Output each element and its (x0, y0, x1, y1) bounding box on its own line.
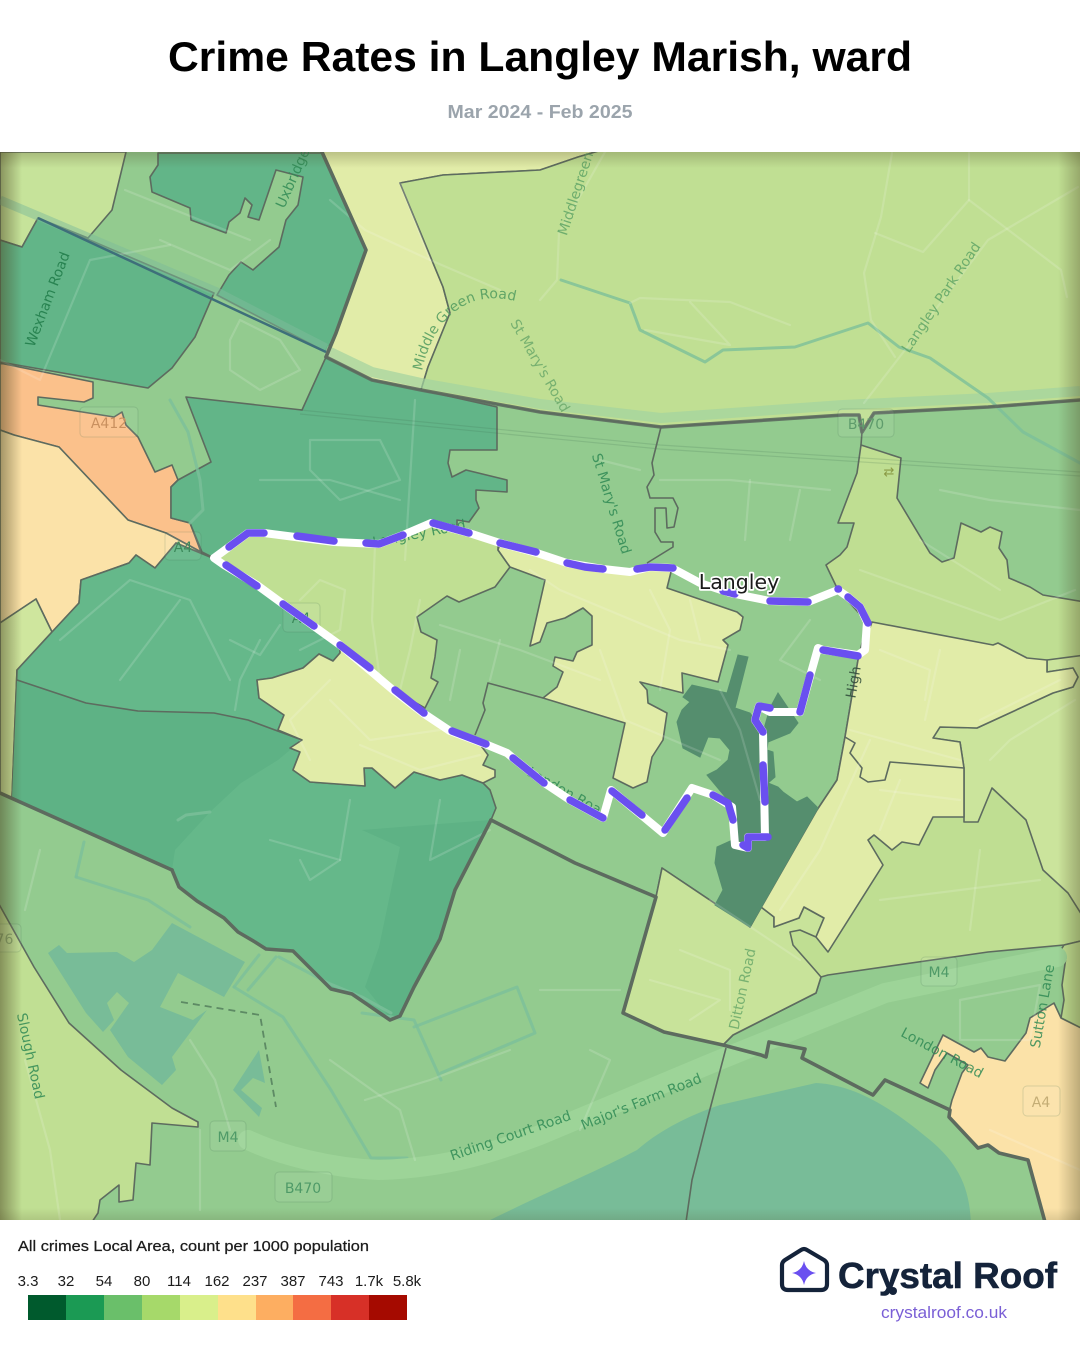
ward purple dashes (226, 523, 868, 848)
legend tick labels: 743 (318, 1273, 344, 1290)
water: reservoir west (48, 923, 245, 1085)
label: Major's Farm Road: Major's Farm Road (579, 1071, 704, 1134)
area: east and south-east pale green (623, 445, 1080, 1045)
dashed track south (181, 1002, 276, 1107)
water: canals and streams (76, 280, 1080, 1158)
area: east edge pale green (1060, 940, 1080, 1026)
label: Slough Road: Slough Road (13, 1012, 47, 1101)
area: cream west (0, 430, 210, 632)
ward boundary: white line with purple dashes (214, 523, 868, 848)
subtitle: date range: Mar 2024 - Feb 2025 (448, 102, 632, 122)
thin boundary lines (17, 427, 862, 1222)
label: Uxbridge: Uxbridge (273, 146, 314, 211)
area: darker band in south-west green (12, 681, 300, 797)
label: St Mary's Road south: St Mary's Road (588, 452, 634, 556)
label: Langley Park Road: Langley Park Road (899, 240, 984, 356)
water: small basin (233, 1050, 265, 1117)
area: pale yellow centre ward (498, 543, 743, 788)
area: east lighter green (933, 655, 1080, 920)
road shields (0, 407, 1060, 1202)
light road network (0, 152, 1080, 1220)
label: Langley Road (under boundary): Langley Road (371, 517, 467, 551)
legend tick labels: 162 (204, 1273, 230, 1290)
legend (18, 1239, 422, 1320)
area: Wexham Road dark green (0, 218, 214, 388)
area: pale green west strip (0, 599, 52, 798)
legend tick labels: 5.8k (393, 1273, 422, 1290)
area: inner east boundary (845, 737, 964, 782)
ward outline white (214, 523, 867, 848)
area: north pale yellow (322, 150, 602, 390)
label: Middle Green Road (curved): Middle Green Road (412, 288, 516, 370)
label: Wexham Road: Wexham Road (23, 250, 74, 349)
legend tick labels: 1.7k (355, 1273, 384, 1290)
legend tick labels: 54 (96, 1273, 112, 1290)
label: High Street: High (843, 665, 865, 700)
shield: B470 south (275, 1172, 332, 1202)
shield: B470 north: B470 (848, 417, 884, 433)
shield: A-road cut off at left (0, 924, 21, 952)
area: Ditton Road pale green (623, 868, 824, 1045)
shield: A4 west (165, 532, 201, 560)
shield: M4 east: M4 (928, 965, 950, 981)
area: south-west dark green (0, 543, 496, 1020)
shield: A4 south-east (1023, 1086, 1060, 1116)
shield: A4 south-east: A4 (1032, 1095, 1050, 1111)
area: north pale green (400, 150, 1080, 432)
area: north-west dark green (150, 153, 366, 352)
area: pale green north ward (214, 523, 510, 708)
icon: house outline with star (782, 1249, 827, 1290)
shield: M4 south-west (210, 1121, 246, 1151)
area: south-west pale green (0, 897, 198, 1225)
shield: M4 south-west: M4 (218, 1130, 239, 1146)
area: pale yellow east ward (750, 622, 1078, 952)
area: darker east part of south-west green (362, 820, 491, 1018)
label: London Road west (under boundary): London Road (524, 764, 612, 823)
label: London Road east: London Road (898, 1025, 986, 1082)
place label: Langley: Langley (699, 570, 779, 594)
thick boundary lines (0, 152, 1080, 1222)
railway embankment strip (0, 200, 1080, 418)
area: cream south-east (920, 1003, 1080, 1225)
road labels (17, 152, 1054, 1160)
area: central dark green (171, 357, 507, 558)
area: red high crime (2, 430, 14, 434)
shield: A4 ward (283, 603, 320, 632)
map panel: choropleth of crime rates (0, 152, 1080, 1220)
railway thin lines (300, 410, 1080, 476)
shield: A4 ward: A4 (292, 611, 310, 627)
label: Riding Court Road: Riding Court Road (448, 1108, 573, 1164)
icon: keyhole tail on y (889, 1287, 897, 1295)
shield: M4 east (921, 957, 957, 986)
legend tick labels (18, 1273, 422, 1290)
label: Middlegreen: Middlegreen (555, 150, 597, 237)
brand logo block (782, 1249, 1058, 1322)
main road band: Riding Court Road to M4 (248, 957, 1057, 1170)
area: pale yellow west of ward centre (257, 645, 495, 788)
area: mid green block outline (475, 683, 543, 735)
shield: A4 west: A4 (174, 540, 192, 556)
area: very dark green centre (677, 655, 818, 927)
title: Crime Rates in Langley Marish, ward (168, 33, 912, 80)
water: lake south (480, 1083, 971, 1225)
shield: B470 south: B470 (285, 1181, 321, 1197)
legend tick labels: 3.3 (18, 1273, 38, 1290)
area: top-left pale green (0, 152, 126, 247)
legend tick labels: 114 (167, 1273, 191, 1290)
legend tick labels: 237 (242, 1273, 268, 1290)
label: St Mary's Road north: St Mary's Road (506, 317, 572, 415)
legend tick labels: 387 (280, 1273, 306, 1290)
map edge vignette (0, 152, 1080, 1220)
legend tick labels: 32 (58, 1273, 74, 1290)
area: orange high crime (0, 363, 201, 552)
shield: A412 (80, 407, 138, 437)
legend title: All crimes Local Area, count per 1000 population (18, 1239, 369, 1255)
label: Sutton Lane: Sutton Lane (1028, 963, 1058, 1049)
shield: A412: A412 (91, 416, 127, 432)
map base: mid green area (0, 152, 1080, 1220)
icon: rail station: ⇄ (884, 465, 895, 480)
website url: crystalroof.co.uk (881, 1304, 1008, 1322)
label: Ditton Road: Ditton Road (727, 947, 760, 1031)
legend tick labels: 80 (134, 1273, 150, 1290)
shield: B470 north (838, 409, 894, 437)
brand name: Crystal Roof (838, 1255, 1058, 1296)
legend colour bar (28, 1295, 407, 1320)
